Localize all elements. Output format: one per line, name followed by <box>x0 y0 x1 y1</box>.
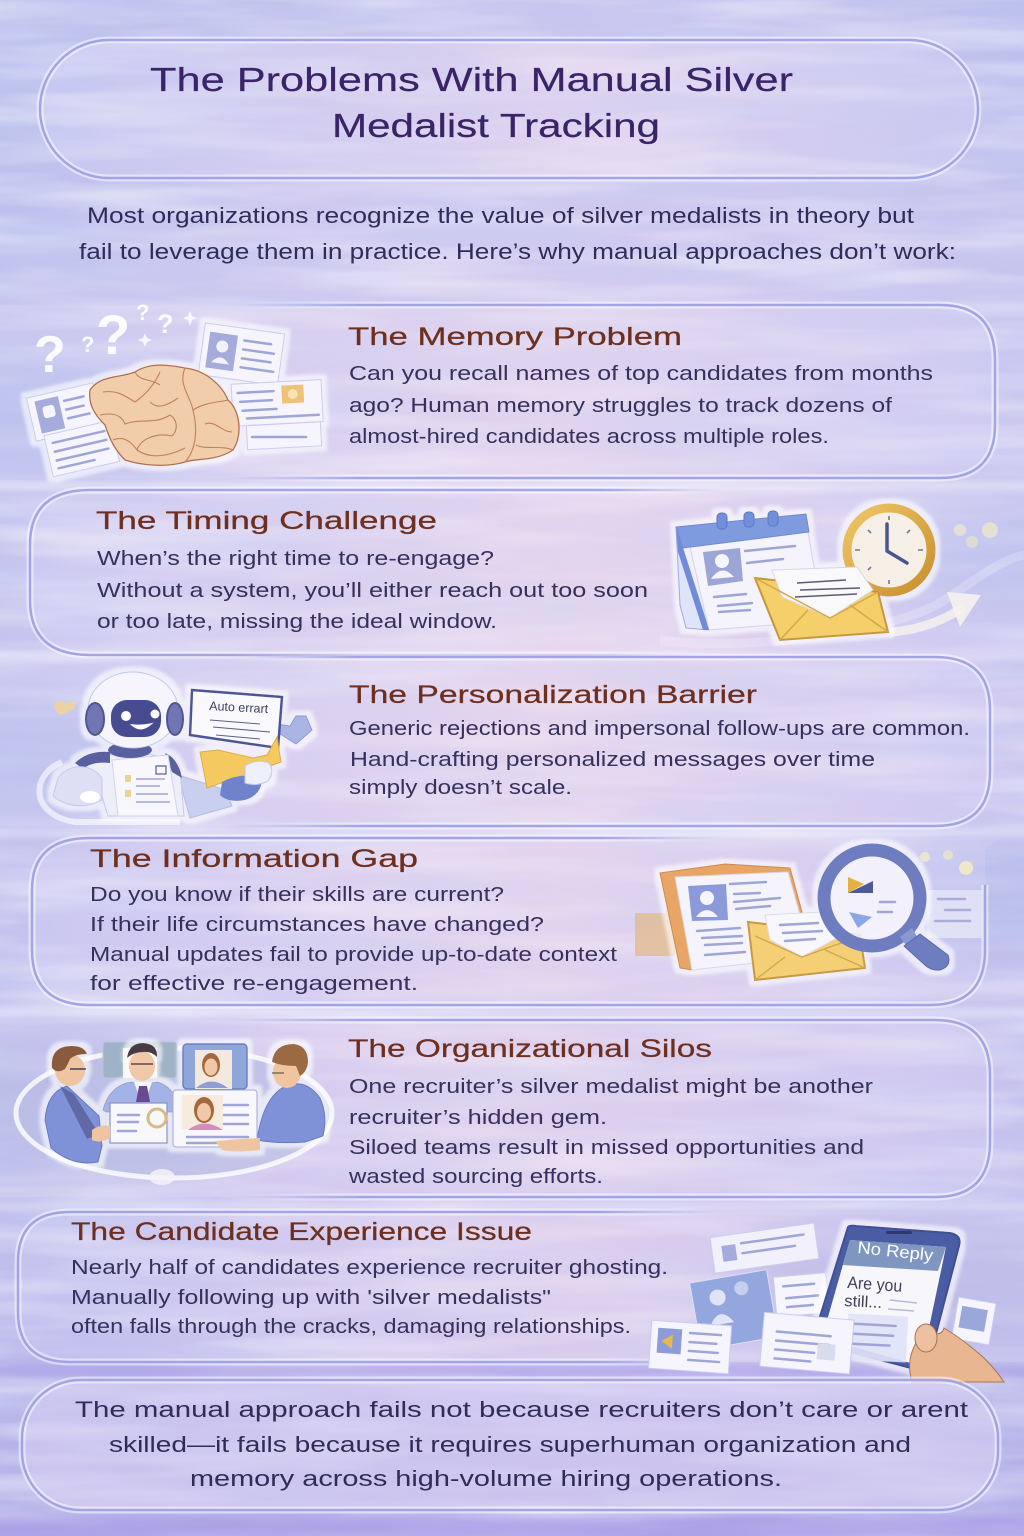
folder <box>660 864 802 970</box>
robot head <box>86 672 183 748</box>
closing text <box>75 1397 968 1491</box>
body: the information gap: Do you know if their skills are current? <box>90 883 504 906</box>
phone <box>812 1226 960 1372</box>
candidate card <box>173 1090 260 1152</box>
right recruiter <box>257 1044 325 1143</box>
icon: calendar, envelope, clock and arrow <box>660 508 1024 644</box>
second recruiter <box>103 1043 179 1143</box>
icon: brain with documents and question marks: ? <box>136 300 149 325</box>
body: the memory problem <box>349 362 933 448</box>
title banner <box>40 40 978 178</box>
calendar <box>676 511 818 630</box>
icon: brain with documents and question marks: ? <box>34 326 66 384</box>
phone message: still... <box>844 1293 883 1312</box>
intro text: Most organizations recognize the value of silver medalists in theory but <box>87 203 914 228</box>
panel: the personalization barrier <box>0 657 990 826</box>
panel: the memory problem <box>0 300 995 478</box>
body: the memory problem: Can you recall names of top candidates from months <box>349 362 933 385</box>
body: the timing challenge <box>97 547 648 633</box>
hand <box>910 1324 1004 1382</box>
body: the information gap: Manual updates fail to provide up-to-date context <box>90 943 617 966</box>
body: the organizational silos <box>348 1075 873 1188</box>
intro text: fail to leverage them in practice. Here’s why manual approaches don’t work: <box>79 239 956 264</box>
body: the personalization barrier: simply doesn’t scale. <box>349 776 572 799</box>
body: the organizational silos: wasted sourcing efforts. <box>348 1165 603 1188</box>
phone message <box>844 1273 917 1312</box>
body: the organizational silos: One recruiter’s silver medalist might be another <box>349 1075 873 1098</box>
body: the memory problem: almost-hired candidates across multiple roles. <box>349 425 829 448</box>
body: the candidate experience issue <box>71 1256 668 1338</box>
icon: brain with documents and question marks: ? <box>96 303 130 366</box>
panel: the timing challenge <box>30 490 1024 655</box>
icon: brain with documents and question marks: ? <box>81 332 94 357</box>
body: the personalization barrier: Generic rejections and impersonal follow-ups are common. <box>349 717 970 740</box>
heading: the personalization barrier: The Personalization Barrier <box>349 681 757 709</box>
left recruiter <box>45 1046 110 1163</box>
icon: robot with letter <box>39 672 312 822</box>
title <box>150 61 793 144</box>
right arm <box>178 775 232 818</box>
body: the timing challenge: Without a system, you’ll either reach out too soon <box>97 579 648 602</box>
robot hand <box>220 761 272 801</box>
body: the timing challenge: When’s the right time to re-engage? <box>97 547 494 570</box>
body: the memory problem: ago? Human memory struggles to track dozens of <box>349 394 892 417</box>
body: the information gap <box>90 883 617 995</box>
phone message: Are you <box>847 1273 903 1296</box>
panel: the information gap <box>32 838 1000 1005</box>
phone header label: No Reply <box>857 1238 935 1265</box>
heading: the information gap: The Information Gap <box>90 845 418 873</box>
heading: the timing challenge: The Timing Challenge <box>96 507 437 535</box>
title: The Problems With Manual Silver <box>150 61 793 98</box>
icon: folder, envelope and magnifier <box>635 850 982 980</box>
envelope <box>748 912 865 980</box>
robot body <box>53 742 184 816</box>
closing text: The manual approach fails not because recruiters don’t care or arent <box>75 1397 968 1422</box>
body: the personalization barrier: Hand-crafting personalized messages over time <box>350 748 875 771</box>
icon: brain with documents and question marks: ? <box>157 309 174 339</box>
body: the candidate experience issue: often falls through the cracks, damaging relationships. <box>71 1315 631 1338</box>
body: the organizational silos: Siloed teams result in missed opportunities and <box>349 1136 864 1159</box>
body: the information gap: for effective re-engagement. <box>90 972 418 995</box>
clock <box>847 508 931 592</box>
body: the candidate experience issue: Nearly half of candidates experience recruiter ghosting. <box>71 1256 668 1279</box>
body: the information gap: If their life circumstances have changed? <box>90 913 544 936</box>
monitor with woman <box>183 1044 247 1089</box>
heading: the organizational silos: The Organizational Silos <box>348 1035 712 1063</box>
letter card <box>190 690 312 788</box>
heading: the memory problem: The Memory Problem <box>348 323 682 351</box>
letter card: Auto errart <box>209 699 269 716</box>
body: the personalization barrier <box>349 717 970 799</box>
body: the timing challenge: or too late, missing the ideal window. <box>97 610 497 633</box>
icon: brain with documents and question marks <box>26 300 323 477</box>
title: Medalist Tracking <box>332 107 660 144</box>
panel: closing statement <box>22 1380 998 1510</box>
body: the candidate experience issue: Manually following up with 'silver medalists" <box>71 1286 551 1309</box>
closing text: memory across high-volume hiring operations. <box>190 1466 782 1491</box>
panel: the candidate experience issue <box>18 1212 1024 1382</box>
heading: the candidate experience issue: The Candidate Experience Issue <box>71 1218 532 1246</box>
icon: recruiters around candidate cards <box>16 1042 332 1185</box>
body: the organizational silos: recruiter’s hidden gem. <box>349 1106 607 1129</box>
envelope <box>755 567 888 640</box>
intro text <box>79 203 956 264</box>
panel: the organizational silos <box>0 1020 990 1197</box>
closing text: skilled—it fails because it requires superhuman organization and <box>109 1432 911 1457</box>
icon: phone with no reply and documents <box>648 1223 1004 1382</box>
magnifier <box>824 850 949 970</box>
